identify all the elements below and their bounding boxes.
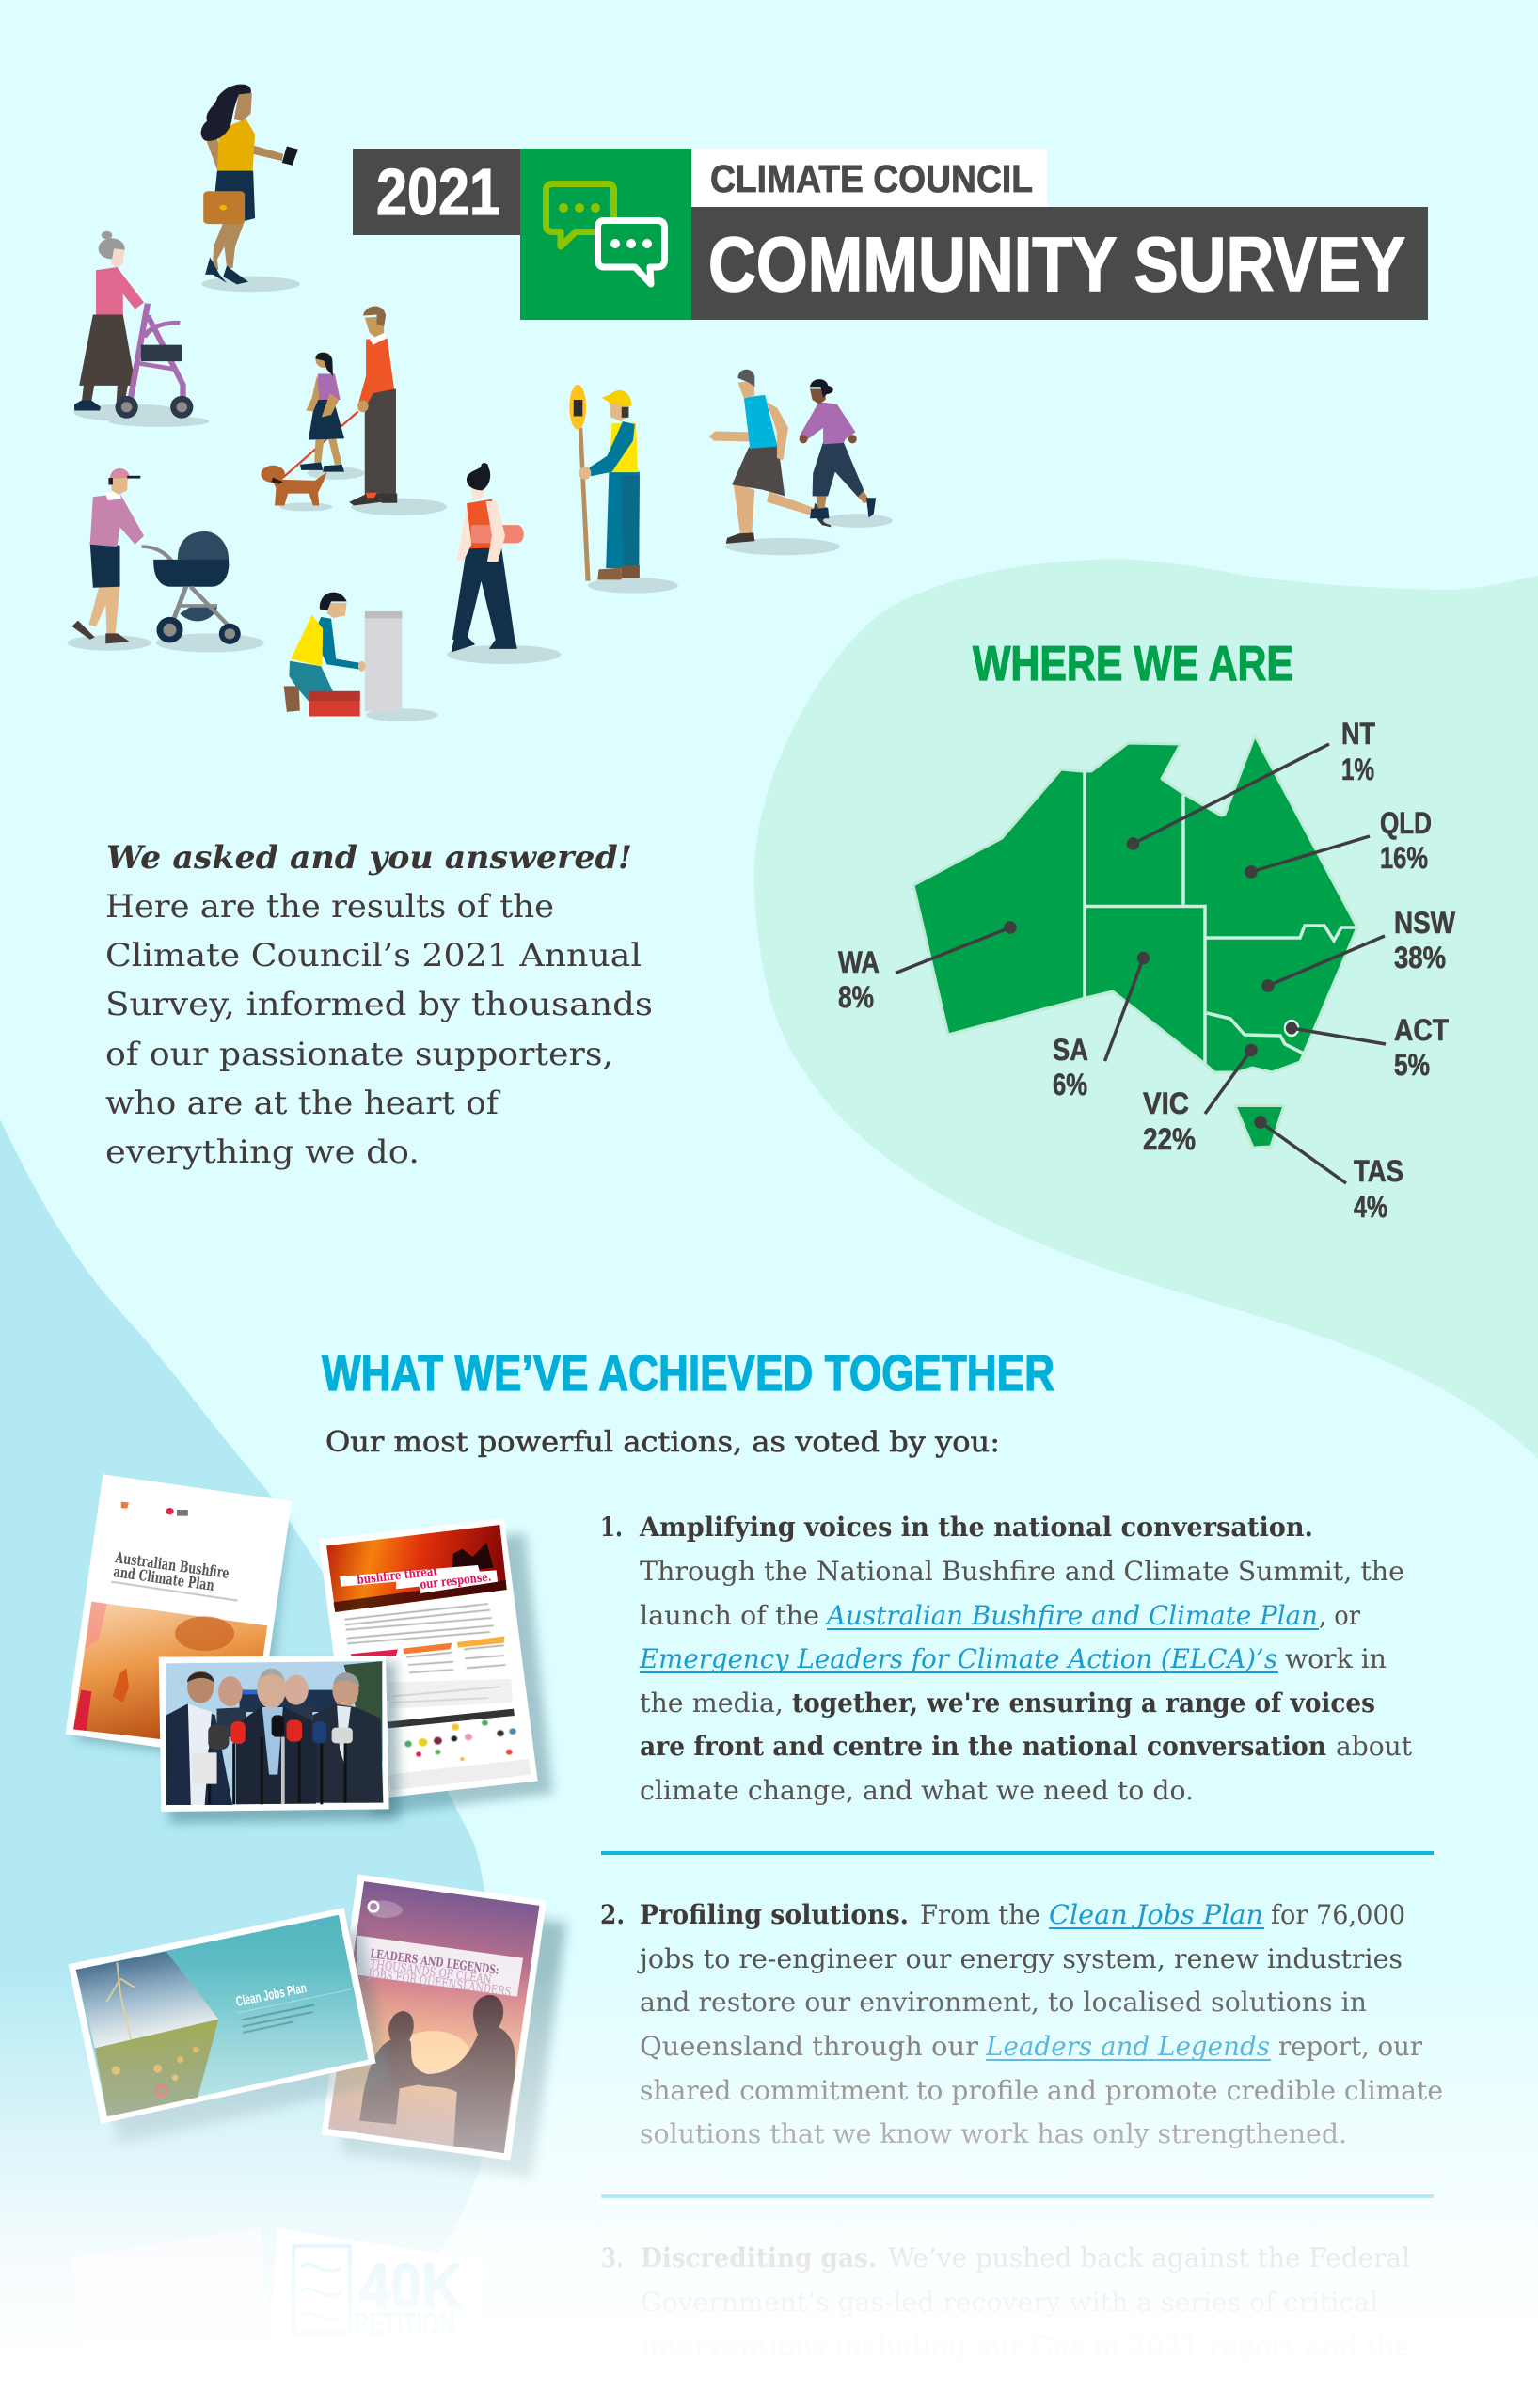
list item 1: Australian Bushfire and Climate Plan — [824, 1600, 1318, 1631]
background shape: blue blob — [0, 1119, 493, 2408]
list item 2: 2. — [600, 1899, 625, 1930]
white label box: CLIMATE COUNCIL — [710, 157, 1033, 200]
list item 1: launch of the — [640, 1600, 819, 1631]
year box: 2021 — [376, 155, 500, 229]
list item 2: From the — [920, 1899, 1040, 1930]
intro text block: Here are the results of the — [105, 888, 554, 926]
faded petition card: 40K — [359, 2251, 462, 2322]
intro text block: who are at the heart of — [105, 1085, 501, 1122]
state labels: QLD — [1380, 806, 1432, 840]
intro text block: We asked and you answered! — [106, 839, 632, 877]
dark title box: COMMUNITY SURVEY — [708, 222, 1405, 308]
person: woman with handbag and phone — [201, 85, 300, 292]
leaders and legends title text: LEADERS AND LEGENDS: — [369, 1947, 499, 1978]
list item 2: shared commitment to profile and promote credible climate — [640, 2075, 1443, 2106]
list item 2: Leaders and Legends — [985, 2031, 1270, 2062]
intro text block: everything we do. — [105, 1133, 420, 1171]
heading: what we've achieved together: WHAT WE’VE ACHIEVED TOGETHER — [322, 1345, 1054, 1402]
green icon box — [520, 149, 691, 320]
state labels: 38% — [1394, 941, 1446, 974]
report title text: and Climate Plan — [112, 1562, 215, 1594]
state labels: VIC — [1143, 1086, 1189, 1120]
flyer headline text: our response. — [420, 1570, 492, 1592]
Tasmania — [1235, 1106, 1284, 1148]
flyer headline text: bushfire threat — [357, 1564, 438, 1588]
leaders and legends title text: THOUSANDS OF CLEAN — [369, 1957, 492, 1988]
collage: clean jobs plan and leaders and legends — [69, 1875, 566, 2178]
list item 3: Discrediting gas. — [641, 2242, 877, 2273]
list item 1: together, we're ensuring a range of voices — [792, 1687, 1375, 1719]
report title text: Australian Bushfire — [114, 1548, 230, 1582]
faded report cover — [72, 2227, 273, 2408]
ACT marker — [1285, 1021, 1298, 1036]
collage: bushfire plan, flyer and press photo — [66, 1474, 553, 1823]
person: lollipop worker with sign — [569, 385, 678, 594]
icon: white speech bubble — [598, 220, 664, 284]
state labels: 5% — [1394, 1048, 1430, 1082]
report cover: clean jobs plan — [69, 1908, 391, 2145]
report cover: leaders and legends — [322, 1875, 566, 2178]
person: elderly woman with walker — [73, 231, 210, 427]
list item 1: work in — [1285, 1643, 1387, 1674]
report cover: bushfire and climate plan — [66, 1474, 292, 1766]
list item 2: for 76,000 — [1271, 1899, 1405, 1930]
faded collage: third item and petition — [72, 2227, 486, 2408]
person: running man — [709, 370, 840, 555]
person: running woman — [800, 379, 893, 528]
list item 1: Emergency Leaders for Climate Action (ELCA)’s — [639, 1643, 1277, 1674]
list item 2: report, our — [1278, 2031, 1423, 2062]
state labels — [838, 717, 1456, 1224]
state labels: NT — [1341, 717, 1375, 751]
leaders and legends title text — [366, 1947, 512, 2000]
mainland — [913, 736, 1357, 1072]
background shape: mint blob — [754, 559, 1538, 1459]
intro text block: of our passionate supporters, — [105, 1036, 613, 1073]
person: man pushing pram — [67, 468, 264, 653]
list item 2: Queensland through our — [640, 2031, 979, 2062]
header banner — [353, 149, 1428, 320]
state labels: 8% — [838, 980, 874, 1014]
subheading: Our most powerful actions, as voted by you: — [325, 1426, 1000, 1459]
state labels: 16% — [1380, 841, 1428, 875]
press photo — [159, 1656, 400, 1823]
intro text block: Survey, informed by thousands — [105, 986, 653, 1023]
heading: where we are: WHERE WE ARE — [973, 637, 1293, 691]
list item 2: Clean Jobs Plan — [1049, 1899, 1263, 1930]
faded petition card — [266, 2228, 486, 2408]
list item 3 — [601, 2242, 1411, 2362]
clean jobs plan title text: Clean Jobs Plan — [234, 1980, 308, 2010]
list item 2: jobs to re-engineer our energy system, renew industries — [637, 1943, 1403, 1974]
list item 1: the media, — [640, 1687, 784, 1719]
state labels: ACT — [1394, 1013, 1449, 1047]
state borders — [1085, 771, 1357, 1064]
faded petition card: PETITION — [354, 2306, 455, 2342]
list item 1: about — [1336, 1731, 1413, 1762]
flyer: bushfire threat — [319, 1518, 553, 1815]
state labels: 4% — [1354, 1190, 1387, 1224]
list item 1: Amplifying voices in the national conversation. — [639, 1512, 1313, 1543]
leader lines and dots — [896, 744, 1386, 1183]
state labels: TAS — [1354, 1154, 1403, 1188]
list item 1: , or — [1319, 1600, 1361, 1631]
list item 2 — [600, 1899, 1443, 2149]
white label box — [691, 149, 1047, 207]
state labels: 1% — [1341, 752, 1374, 786]
list item 3: 3. — [601, 2242, 624, 2273]
list item 1: 1. — [600, 1512, 623, 1543]
list item 1: climate change, and what we need to do. — [640, 1775, 1194, 1806]
list item 1: Through the National Bushfire and Climate Summit, the — [640, 1556, 1404, 1587]
intro text block: Climate Council’s 2021 Annual — [105, 937, 642, 974]
list item 1 — [600, 1512, 1413, 1806]
state labels: 22% — [1143, 1122, 1196, 1156]
leaders and legends title text: JOBS FOR QUEENSLANDERS — [366, 1967, 512, 2000]
flyer headline text — [357, 1564, 492, 1592]
dark title box — [691, 207, 1428, 320]
state labels: NSW — [1394, 906, 1456, 940]
list item 2: and restore our environment, to localised solutions in — [640, 1987, 1367, 2018]
list item 3: interventions including our Gas in 2021 report and the — [641, 2331, 1411, 2362]
list item 1: are front and centre in the national conversation — [640, 1731, 1326, 1762]
report title text — [112, 1548, 230, 1594]
list item 2: Profiling solutions. — [640, 1899, 909, 1930]
list item 3: Government’s gas-led recovery with a series of critical — [641, 2287, 1378, 2318]
person: woman with yoga mat — [447, 463, 561, 664]
list item 2: solutions that we know work has only strengthened. — [640, 2118, 1347, 2149]
list item 3: We’ve pushed back against the Federal — [888, 2242, 1410, 2273]
people illustrations — [67, 85, 893, 721]
person: man and girl walking dog — [261, 306, 447, 515]
person: kneeling worker with toolbox — [284, 593, 438, 721]
state labels: 6% — [1053, 1068, 1087, 1101]
state labels: WA — [838, 945, 880, 979]
white fade overlay — [0, 1966, 1538, 2408]
map of Australia — [838, 717, 1456, 1224]
state labels: SA — [1053, 1033, 1088, 1067]
intro text block — [105, 839, 653, 1171]
icon: green speech bubble — [546, 184, 613, 246]
